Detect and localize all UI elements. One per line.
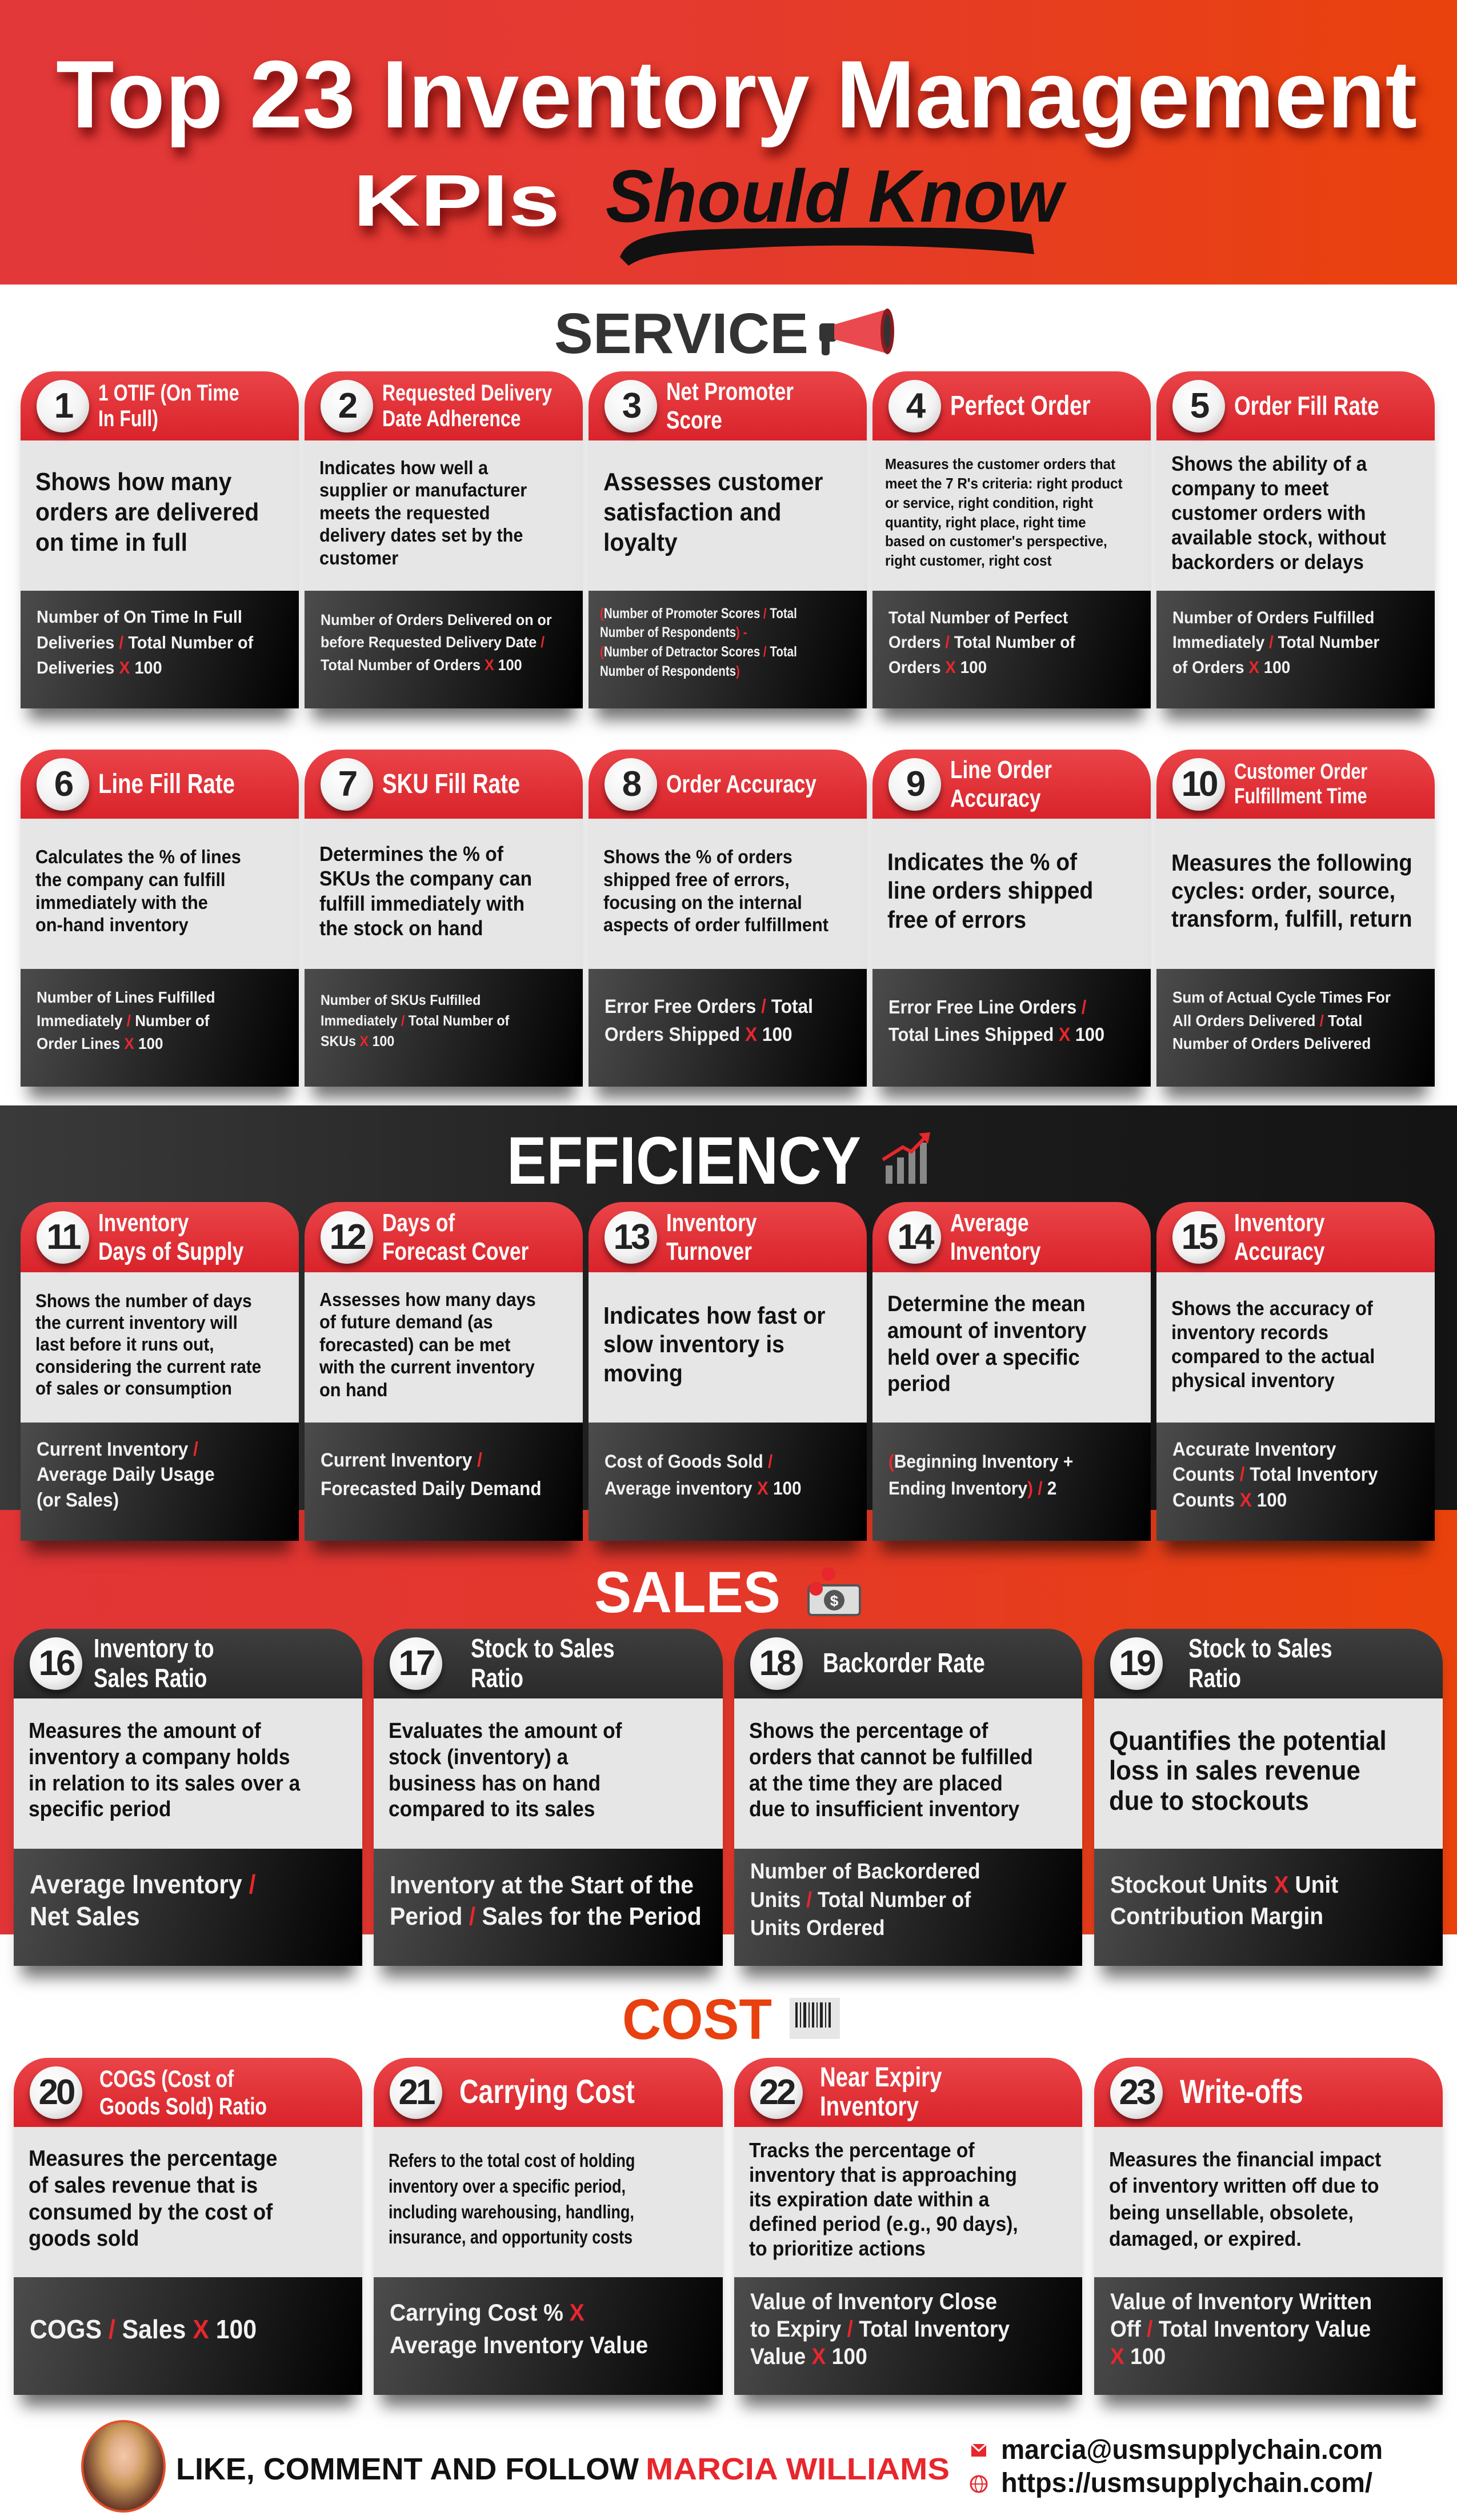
- panel: 15 Inventory Accuracy: physical inventory: [1171, 1369, 1335, 1392]
- panel: 8 Order Accuracy: 8: [622, 764, 639, 804]
- panel: 2 Requested Delivery Date Adherence: supplier or manufacturer: [319, 479, 527, 500]
- panel: 22 Near Expiry Inventory: [734, 2058, 1082, 2395]
- panel: 15 Inventory Accuracy: Counts / Total Inventory: [1172, 1464, 1378, 1485]
- panel: 1 OTIF: Number of On Time In Full: [37, 607, 242, 627]
- panel: 18 Backorder Rate: at the time they are placed: [749, 1771, 1003, 1795]
- panel: 23 Write-offs: of inventory written off due to: [1109, 2174, 1379, 2197]
- panel: 17 Stock to Sales Ratio: business has on hand: [389, 1771, 601, 1795]
- panel: 10 Customer Order Fulfillment Time: Sum of Actual Cycle Times For: [1172, 988, 1391, 1006]
- panel: 4 Perfect Order: [872, 371, 1151, 708]
- panel: 11 Inventory Days of Supply: Shows the number of days: [35, 1291, 252, 1311]
- contact info: https://usmsupplychain.com/: [1001, 2468, 1372, 2498]
- panel: 7 SKU Fill Rate: Immediately / Total Number of: [321, 1013, 509, 1029]
- title: [54, 41, 1426, 242]
- panel: 4 Perfect Order: right customer, right cost: [885, 552, 1052, 569]
- panel: 20 COGS Ratio: 20: [39, 2073, 73, 2112]
- panel: 16 Inventory to Sales Ratio: [14, 1629, 362, 1966]
- panel: 16 Inventory to Sales Ratio: Measures the amount of: [29, 1719, 261, 1743]
- panel: 21 Carrying Cost: Carrying Cost % X: [390, 2299, 585, 2326]
- panel: 19 Stock to Sales Ratio: loss in sales revenue: [1109, 1755, 1360, 1785]
- panel: 1 OTIF: 1 OTIF (On Time: [98, 380, 239, 406]
- panel: 16 Inventory to Sales Ratio: in relation to its sales over a: [29, 1771, 300, 1795]
- panel: 23 Write-offs: [1094, 2058, 1443, 2395]
- panel: 14 Average Inventory: (Beginning Inventory +: [888, 1451, 1073, 1472]
- icon: money: $: [830, 1592, 839, 1609]
- panel: 14 Average Inventory: period: [887, 1372, 951, 1396]
- panel: 23 Write-offs: being unsellable, obsolete,: [1109, 2201, 1354, 2223]
- panel: 22 Near Expiry Inventory: Inventory: [820, 2091, 919, 2122]
- panel: 3 Net Promoter Score: Score: [666, 406, 722, 434]
- panel: 2 Requested Delivery Date Adherence: Indicates how well a: [319, 457, 488, 478]
- panel: 22 Near Expiry Inventory: its expiration date within a: [749, 2188, 989, 2211]
- panel: 12 Days of Forecast Cover: on hand: [319, 1379, 387, 1400]
- panel: 3 Net Promoter Score: satisfaction and: [603, 498, 782, 526]
- panel: 7 SKU Fill Rate: [305, 750, 583, 1087]
- panel: 1 OTIF: Deliveries / Total Number of: [37, 632, 253, 652]
- panel: 12 Days of Forecast Cover: 12: [330, 1217, 364, 1257]
- panel: 23 Write-offs: damaged, or expired.: [1109, 2227, 1302, 2250]
- panel: 15 Inventory Accuracy: Accuracy: [1234, 1237, 1325, 1265]
- panel: 17 Stock to Sales Ratio: Period / Sales for the Period: [390, 1902, 702, 1930]
- panel: 4 Perfect Order: 4: [906, 386, 923, 426]
- panel: 21 Carrying Cost: insurance, and opportunity costs: [389, 2226, 633, 2247]
- panel: 13 Inventory Turnover: Indicates how fast or: [603, 1302, 826, 1329]
- panel: 13 Inventory Turnover: moving: [603, 1360, 683, 1387]
- panel: 11 Inventory Days of Supply: last before it runs out,: [35, 1334, 214, 1355]
- panel: 3 Net Promoter Score: (Number of Detractor Scores / Total: [600, 644, 797, 660]
- panel: 14 Average Inventory: [872, 1202, 1151, 1541]
- panel: 12 Days of Forecast Cover: Days of: [382, 1209, 455, 1237]
- subtitle: Should Know: Should Know: [606, 154, 1067, 238]
- panel: 2 Requested Delivery Date Adherence: before Requested Delivery Date /: [321, 634, 545, 651]
- panel: 20 COGS Ratio: goods sold: [29, 2226, 139, 2251]
- panel: 21 Carrying Cost: 21: [399, 2073, 433, 2112]
- panel: 7 SKU Fill Rate: SKUs X 100: [321, 1033, 394, 1049]
- panel: 4 Perfect Order: Total Number of Perfect: [888, 608, 1068, 627]
- panel: 8 Order Accuracy: [589, 750, 867, 1087]
- panel: 3 Net Promoter Score: [589, 371, 867, 708]
- icon: growth chart: [883, 1132, 930, 1184]
- panel: 20 COGS Ratio: [14, 2058, 362, 2395]
- panel: 22 Near Expiry Inventory: to prioritize actions: [749, 2237, 926, 2260]
- panel: 8 Order Accuracy: aspects of order fulfillment: [603, 914, 828, 935]
- panel: 5 Order Fill Rate: company to meet: [1171, 476, 1328, 500]
- panel: 12 Days of Forecast Cover: Assesses how many days: [319, 1289, 536, 1310]
- panel: 16 Inventory to Sales Ratio: inventory a company holds: [29, 1745, 290, 1769]
- panel: 8 Order Accuracy: Orders Shipped X 100: [605, 1024, 792, 1045]
- panel: 11 Inventory Days of Supply: 11: [46, 1217, 79, 1257]
- panel: 20 COGS Ratio: Goods Sold) Ratio: [99, 2092, 267, 2120]
- panel: 9 Line Order Accuracy: free of errors: [887, 906, 1026, 933]
- panel: 21 Carrying Cost: Refers to the total cost of holding: [389, 2150, 635, 2171]
- panel: 2 Requested Delivery Date Adherence: Requested Delivery: [382, 380, 552, 406]
- panel: 5 Order Fill Rate: Number of Orders Fulfilled: [1172, 608, 1374, 627]
- panel: 14 Average Inventory: Inventory: [950, 1237, 1040, 1265]
- panel: 5 Order Fill Rate: [1156, 371, 1435, 708]
- panel: 15 Inventory Accuracy: Shows the accuracy of: [1171, 1297, 1373, 1320]
- panel: 19 Stock to Sales Ratio: Quantifies the potential: [1109, 1725, 1387, 1756]
- panel: 14 Average Inventory: Ending Inventory) / 2: [888, 1477, 1056, 1498]
- panel: 19 Stock to Sales Ratio: Stockout Units X Unit: [1110, 1871, 1338, 1898]
- panel: 18 Backorder Rate: Backorder Rate: [823, 1648, 985, 1678]
- panel: 15 Inventory Accuracy: [1156, 1202, 1435, 1541]
- panel: 18 Backorder Rate: Number of Backordered: [750, 1860, 980, 1884]
- panel: 5 Order Fill Rate: 5: [1190, 386, 1207, 426]
- panel: 9 Line Order Accuracy: Line Order: [950, 756, 1052, 784]
- panel: 8 Order Accuracy: focusing on the internal: [603, 891, 802, 913]
- panel: 8 Order Accuracy: Error Free Orders / Total: [605, 996, 813, 1017]
- panel: 5 Order Fill Rate: Shows the ability of a: [1171, 452, 1367, 475]
- panel: 19 Stock to Sales Ratio: Contribution Margin: [1110, 1902, 1323, 1929]
- panel: 16 Inventory to Sales Ratio: Net Sales: [30, 1901, 140, 1931]
- panel: 9 Line Order Accuracy: line orders shipped: [887, 877, 1093, 904]
- panel: 3 Net Promoter Score: 3: [622, 386, 639, 426]
- panel: 14 Average Inventory: 14: [898, 1217, 932, 1257]
- panel: 12 Days of Forecast Cover: [305, 1202, 583, 1541]
- panel: 6 Line Fill Rate: Immediately / Number of: [37, 1012, 209, 1029]
- panel: 3 Net Promoter Score: Number of Respondents): [600, 663, 740, 679]
- contact info: marcia@usmsupplychain.com: [1001, 2435, 1383, 2465]
- panel: 23 Write-offs: Measures the financial impact: [1109, 2148, 1381, 2171]
- panel: 4 Perfect Order: Orders X 100: [888, 658, 987, 677]
- panel: 15 Inventory Accuracy: Inventory: [1234, 1209, 1324, 1237]
- panel: 11 Inventory Days of Supply: the current inventory will: [35, 1312, 238, 1333]
- panel: 20 COGS Ratio: consumed by the cost of: [29, 2200, 273, 2225]
- panel: 23 Write-offs: Value of Inventory Written: [1110, 2289, 1372, 2314]
- panel: 9 Line Order Accuracy: [872, 750, 1151, 1087]
- panel: 14 Average Inventory: amount of inventory: [887, 1319, 1087, 1343]
- panel: 12 Days of Forecast Cover: Forecast Cover: [382, 1237, 529, 1265]
- panel: 4 Perfect Order: Measures the customer orders that: [885, 455, 1115, 472]
- panel: 23 Write-offs: Write-offs: [1180, 2073, 1303, 2110]
- panel: 22 Near Expiry Inventory: Near Expiry: [820, 2062, 942, 2093]
- panel: 10 Customer Order Fulfillment Time: Customer Order: [1234, 760, 1367, 784]
- panel: 16 Inventory to Sales Ratio: 16: [39, 1644, 73, 1683]
- panel: 11 Inventory Days of Supply: considering the current rate: [35, 1356, 261, 1377]
- panel: 13 Inventory Turnover: Inventory: [666, 1209, 756, 1237]
- contact info: [970, 2435, 1383, 2498]
- panel: 15 Inventory Accuracy: 15: [1182, 1217, 1216, 1257]
- panel: 14 Average Inventory: Average: [950, 1209, 1029, 1237]
- panel: 2 Requested Delivery Date Adherence: delivery dates set by the: [319, 524, 523, 546]
- panel: 6 Line Fill Rate: Order Lines X 100: [37, 1035, 163, 1052]
- panel: 2 Requested Delivery Date Adherence: 2: [338, 386, 355, 426]
- panel: 4 Perfect Order: Perfect Order: [950, 391, 1090, 421]
- panel: 19 Stock to Sales Ratio: [1094, 1629, 1443, 1966]
- panel: 23 Write-offs: 23: [1119, 2073, 1154, 2112]
- panel: 2 Requested Delivery Date Adherence: meets the requested: [319, 502, 490, 523]
- follow text: MARCIA WILLIAMS: [646, 2452, 950, 2486]
- panel: 13 Inventory Turnover: Turnover: [666, 1237, 752, 1265]
- panel: 6 Line Fill Rate: on-hand inventory: [35, 914, 189, 935]
- panel: 7 SKU Fill Rate: SKU Fill Rate: [382, 769, 520, 799]
- panel: 12 Days of Forecast Cover: Forecasted Daily Demand: [321, 1477, 542, 1499]
- panel: 14 Average Inventory: Determine the mean: [887, 1292, 1086, 1316]
- title: Top 23 Inventory Management: [56, 41, 1417, 148]
- panel: 1 OTIF: orders are delivered: [35, 498, 259, 526]
- icon: money: [808, 1567, 860, 1615]
- panel: 7 SKU Fill Rate: Determines the % of: [319, 842, 503, 866]
- panel: 6 Line Fill Rate: [21, 750, 299, 1087]
- panel: 8 Order Accuracy: Shows the % of orders: [603, 846, 792, 867]
- panel: 13 Inventory Turnover: slow inventory is: [603, 1331, 784, 1357]
- panel: 9 Line Order Accuracy: Accuracy: [950, 784, 1041, 812]
- panel: 18 Backorder Rate: orders that cannot be fulfilled: [749, 1745, 1033, 1769]
- panel: 22 Near Expiry Inventory: Value X 100: [750, 2344, 867, 2369]
- panel: 10 Customer Order Fulfillment Time: cycles: order, source,: [1171, 878, 1395, 904]
- panel: 1 OTIF: Deliveries X 100: [37, 658, 162, 678]
- panel: 15 Inventory Accuracy: inventory records: [1171, 1321, 1328, 1344]
- panel: 13 Inventory Turnover: [589, 1202, 867, 1541]
- panel: 2 Requested Delivery Date Adherence: customer: [319, 547, 398, 568]
- panel: 20 COGS Ratio: of sales revenue that is: [29, 2173, 258, 2198]
- panel: 9 Line Order Accuracy: 9: [906, 764, 923, 804]
- panel: 12 Days of Forecast Cover: forecasted) can be met: [319, 1334, 510, 1355]
- panel: 21 Carrying Cost: including warehousing, handling,: [389, 2201, 634, 2222]
- panel: 17 Stock to Sales Ratio: 17: [399, 1644, 433, 1683]
- panel: 1 OTIF: In Full): [98, 406, 158, 431]
- panel: 15 Inventory Accuracy: Counts X 100: [1172, 1489, 1287, 1511]
- panel: 7 SKU Fill Rate: SKUs the company can: [319, 867, 532, 890]
- panel: 8 Order Accuracy: Order Accuracy: [666, 770, 816, 798]
- panel: 9 Line Order Accuracy: Indicates the % of: [887, 848, 1077, 875]
- panel: 17 Stock to Sales Ratio: Ratio: [471, 1663, 523, 1693]
- panel: 1 OTIF: [21, 371, 299, 708]
- panel: 12 Days of Forecast Cover: Current Inventory /: [321, 1449, 482, 1471]
- panel: 6 Line Fill Rate: Calculates the % of lines: [35, 846, 241, 867]
- panel: 10 Customer Order Fulfillment Time: 10: [1182, 764, 1216, 804]
- panel: 17 Stock to Sales Ratio: [374, 1629, 723, 1966]
- panel: 2 Requested Delivery Date Adherence: Date Adherence: [382, 406, 521, 431]
- panel: 11 Inventory Days of Supply: [21, 1202, 299, 1541]
- panel: 19 Stock to Sales Ratio: Ratio: [1188, 1663, 1241, 1693]
- panel: 21 Carrying Cost: inventory over a specific period,: [389, 2176, 626, 2197]
- panel: 22 Near Expiry Inventory: inventory that is approaching: [749, 2163, 1017, 2186]
- panel: 3 Net Promoter Score: Assesses customer: [603, 468, 823, 496]
- panel: 16 Inventory to Sales Ratio: Inventory to: [94, 1633, 214, 1663]
- panel: 18 Backorder Rate: Shows the percentage of: [749, 1719, 988, 1743]
- panel: 22 Near Expiry Inventory: defined period (e.g., 90 days),: [749, 2212, 1018, 2235]
- panel: 11 Inventory Days of Supply: of sales or consumption: [35, 1378, 232, 1399]
- panel: 17 Stock to Sales Ratio: compared to its sales: [389, 1797, 595, 1821]
- panel: 19 Stock to Sales Ratio: 19: [1119, 1644, 1154, 1683]
- panel: 5 Order Fill Rate: of Orders X 100: [1172, 658, 1290, 677]
- panel: 16 Inventory to Sales Ratio: Average Inventory /: [30, 1869, 255, 1899]
- panel: 7 SKU Fill Rate: 7: [338, 764, 355, 804]
- panel: 15 Inventory Accuracy: Accurate Inventory: [1172, 1439, 1336, 1460]
- panel: 21 Carrying Cost: Average Inventory Value: [390, 2331, 648, 2358]
- panel: 5 Order Fill Rate: available stock, without: [1171, 526, 1386, 549]
- panel: 7 SKU Fill Rate: Number of SKUs Fulfilled: [321, 992, 481, 1008]
- panel: 18 Backorder Rate: Units Ordered: [750, 1916, 885, 1940]
- panel: 11 Inventory Days of Supply: Average Daily Usage: [37, 1464, 215, 1485]
- panel: 22 Near Expiry Inventory: 22: [759, 2073, 794, 2112]
- panel: 7 SKU Fill Rate: fulfill immediately with: [319, 891, 525, 915]
- panel: 10 Customer Order Fulfillment Time: [1156, 750, 1435, 1087]
- panel: 1 OTIF: 1: [54, 386, 71, 426]
- panel: 18 Backorder Rate: due to insufficient inventory: [749, 1797, 1019, 1821]
- panel: 10 Customer Order Fulfillment Time: Number of Orders Delivered: [1172, 1035, 1371, 1052]
- icon: barcode: [790, 1998, 840, 2039]
- panel: 23 Write-offs: Off / Total Inventory Value: [1110, 2317, 1371, 2342]
- panel: 11 Inventory Days of Supply: Current Inventory /: [37, 1439, 198, 1460]
- panel: 12 Days of Forecast Cover: of future demand (as: [319, 1311, 493, 1332]
- panel: 11 Inventory Days of Supply: Days of Supply: [98, 1237, 243, 1265]
- panel: 10 Customer Order Fulfillment Time: Fulfillment Time: [1234, 784, 1367, 808]
- panel: 4 Perfect Order: based on customer's perspective,: [885, 532, 1107, 550]
- panel: 13 Inventory Turnover: Average inventory X 100: [605, 1477, 802, 1498]
- panel: 4 Perfect Order: Orders / Total Number of: [888, 633, 1075, 652]
- panel: 2 Requested Delivery Date Adherence: [305, 371, 583, 708]
- panel: 17 Stock to Sales Ratio: Stock to Sales: [471, 1633, 615, 1663]
- panel: 3 Net Promoter Score: loyalty: [603, 528, 678, 556]
- panel: 1 OTIF: on time in full: [35, 528, 187, 556]
- panel: 5 Order Fill Rate: backorders or delays: [1171, 550, 1364, 574]
- panel: 3 Net Promoter Score: Number of Respondents) -: [600, 624, 747, 640]
- panel: 21 Carrying Cost: Carrying Cost: [459, 2073, 635, 2110]
- panel: 12 Days of Forecast Cover: with the current inventory: [319, 1356, 535, 1377]
- panel: 5 Order Fill Rate: customer orders with: [1171, 501, 1366, 524]
- panel: 10 Customer Order Fulfillment Time: All Orders Delivered / Total: [1172, 1012, 1362, 1029]
- panel: 5 Order Fill Rate: Order Fill Rate: [1234, 391, 1379, 420]
- follow text: [176, 2452, 950, 2486]
- panel: 4 Perfect Order: quantity, right place, right time: [885, 513, 1086, 530]
- panel: 19 Stock to Sales Ratio: due to stockouts: [1109, 1785, 1309, 1816]
- red sales background: [0, 1510, 1457, 1934]
- panel: 21 Carrying Cost: [374, 2058, 723, 2395]
- panel: 9 Line Order Accuracy: Total Lines Shipped X 100: [888, 1024, 1104, 1045]
- panel: 16 Inventory to Sales Ratio: Sales Ratio: [94, 1663, 207, 1693]
- header banner: [0, 0, 1457, 285]
- panel: 17 Stock to Sales Ratio: Evaluates the amount of: [389, 1719, 622, 1743]
- follow text: LIKE, COMMENT AND FOLLOW: [176, 2452, 639, 2486]
- panel: 6 Line Fill Rate: 6: [54, 764, 71, 804]
- panel: 17 Stock to Sales Ratio: stock (inventory) a: [389, 1745, 568, 1769]
- panel: 10 Customer Order Fulfillment Time: transform, fulfill, return: [1171, 906, 1412, 932]
- panel: 11 Inventory Days of Supply: Inventory: [98, 1209, 189, 1237]
- panel: 5 Order Fill Rate: Immediately / Total Number: [1172, 633, 1379, 652]
- panel: 22 Near Expiry Inventory: Value of Inventory Close: [750, 2289, 997, 2314]
- panel: 20 COGS Ratio: COGS / Sales X 100: [30, 2314, 257, 2344]
- panel: 11 Inventory Days of Supply: (or Sales): [37, 1489, 119, 1511]
- icon: megaphone: [819, 309, 894, 355]
- panel: 8 Order Accuracy: shipped free of errors,: [603, 869, 790, 890]
- panel: 18 Backorder Rate: [734, 1629, 1082, 1966]
- panel: 4 Perfect Order: meet the 7 R's criteria: right product: [885, 475, 1123, 492]
- panel: 23 Write-offs: X 100: [1110, 2344, 1166, 2369]
- panel: 20 COGS Ratio: Measures the percentage: [29, 2146, 277, 2171]
- panel: 3 Net Promoter Score: (Number of Promoter Scores / Total: [600, 606, 797, 622]
- panel: 10 Customer Order Fulfillment Time: Measures the following: [1171, 850, 1412, 876]
- panel: 14 Average Inventory: held over a specific: [887, 1345, 1080, 1370]
- panel: 17 Stock to Sales Ratio: Inventory at the Start of the: [390, 1870, 694, 1899]
- panel: 15 Inventory Accuracy: compared to the actual: [1171, 1345, 1375, 1368]
- panel: 2 Requested Delivery Date Adherence: Total Number of Orders X 100: [321, 656, 522, 674]
- panel: 1 OTIF: Shows how many: [35, 468, 231, 496]
- panel: 3 Net Promoter Score: Net Promoter: [666, 378, 794, 406]
- panel: 6 Line Fill Rate: Line Fill Rate: [98, 769, 235, 799]
- panel: 18 Backorder Rate: 18: [759, 1644, 794, 1683]
- panel: 4 Perfect Order: or service, right condition, right: [885, 494, 1093, 511]
- title: KPIs: [353, 160, 560, 242]
- panel: 9 Line Order Accuracy: Error Free Line Orders /: [888, 996, 1086, 1017]
- panel: 6 Line Fill Rate: immediately with the: [35, 891, 208, 913]
- panel: 22 Near Expiry Inventory: to Expiry / Total Inventory: [750, 2317, 1010, 2342]
- panel: 2 Requested Delivery Date Adherence: Number of Orders Delivered on or: [321, 611, 552, 628]
- panel: 20 COGS Ratio: COGS (Cost of: [99, 2065, 234, 2092]
- panel: 16 Inventory to Sales Ratio: specific period: [29, 1797, 171, 1821]
- panel: 7 SKU Fill Rate: the stock on hand: [319, 916, 483, 940]
- panel: 13 Inventory Turnover: 13: [614, 1217, 648, 1257]
- panel: 6 Line Fill Rate: Number of Lines Fulfilled: [37, 988, 215, 1006]
- panel: 19 Stock to Sales Ratio: Stock to Sales: [1188, 1633, 1332, 1663]
- panel: 6 Line Fill Rate: the company can fulfill: [35, 869, 226, 890]
- panel: 22 Near Expiry Inventory: Tracks the percentage of: [749, 2138, 974, 2162]
- footer: [81, 2420, 1383, 2513]
- panel: 13 Inventory Turnover: Cost of Goods Sold /: [605, 1451, 772, 1472]
- dark efficiency background: [0, 1105, 1457, 1510]
- icon: profile photo: [81, 2420, 166, 2513]
- panel: 18 Backorder Rate: Units / Total Number of: [750, 1888, 971, 1912]
